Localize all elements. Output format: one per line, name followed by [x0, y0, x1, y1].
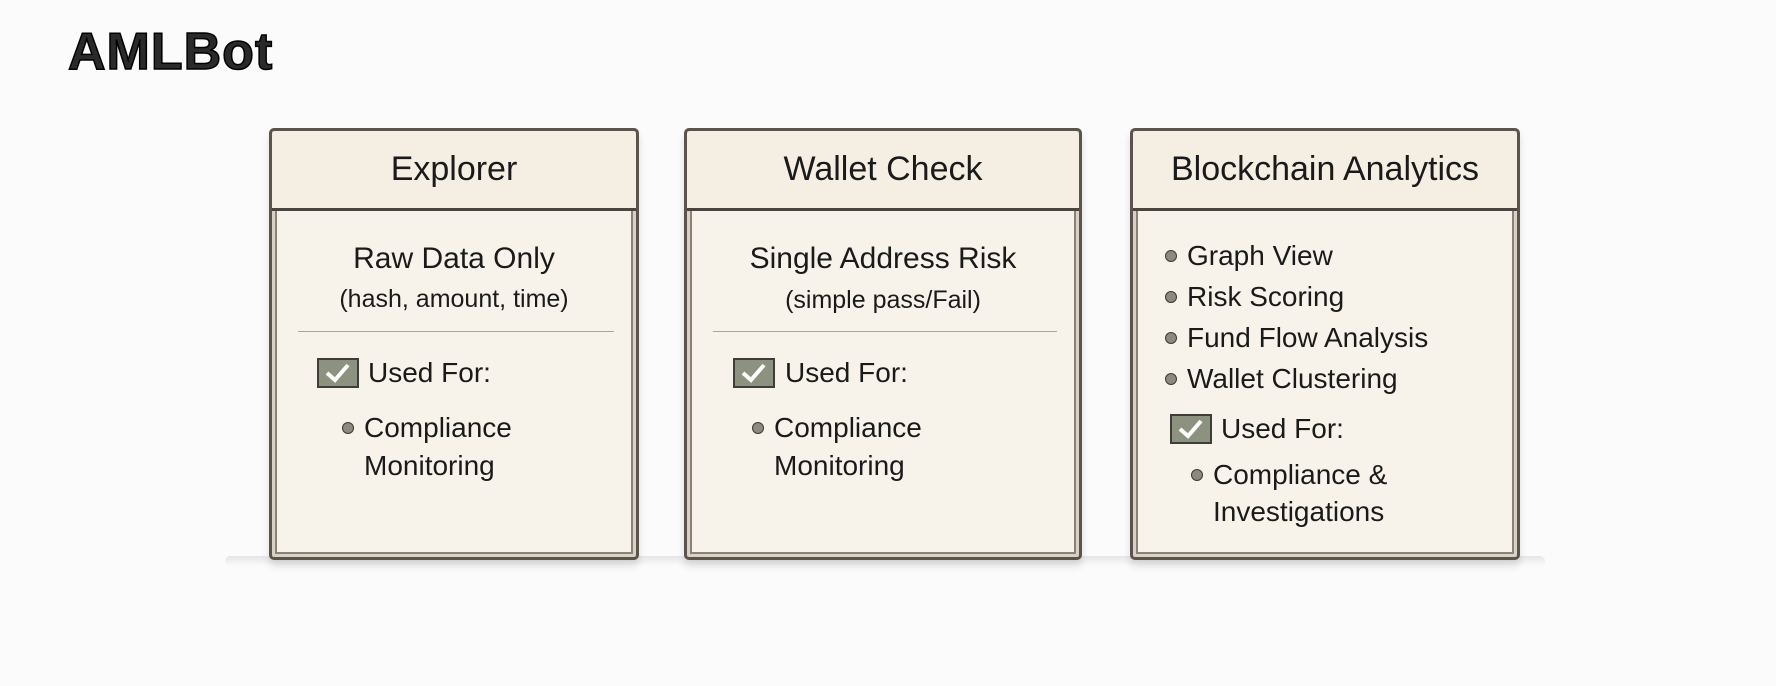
panel: Explorer	[269, 128, 639, 560]
heading: Blockchain Analytics	[1133, 131, 1517, 211]
list: features	[1165, 240, 1428, 394]
list: features: Graph View	[1187, 240, 1333, 271]
bullet: compliance monitoring	[752, 412, 922, 481]
heading: Wallet Check	[687, 131, 1079, 211]
text: used for: Used For:	[1221, 413, 1344, 444]
bullet: compliance investigations: Compliance &	[1213, 459, 1387, 490]
bullet: compliance monitoring	[342, 412, 512, 481]
bullet: compliance monitoring: Compliance	[364, 412, 512, 443]
text: simple pass fail: (simple pass/Fail)	[785, 286, 981, 314]
heading: Explorer: Explorer	[391, 150, 517, 188]
text: single address risk: Single Address Risk	[750, 242, 1016, 275]
list: features: Risk Scoring	[1187, 281, 1344, 312]
text: raw data only: Raw Data Only	[353, 242, 555, 275]
heading: Wallet Check: Wallet Check	[783, 150, 983, 188]
text: hash amount time: (hash, amount, time)	[339, 285, 569, 313]
list: features: Wallet Clustering	[1187, 363, 1398, 394]
panel: Wallet Check	[684, 128, 1082, 560]
text: used for: Used For:	[368, 357, 491, 388]
bullet: compliance monitoring: Monitoring	[774, 450, 905, 481]
panel: Blockchain Analytics	[1130, 128, 1520, 560]
bullet: compliance investigations: Investigations	[1213, 496, 1384, 527]
logo: AMLBot: AMLBot	[68, 23, 273, 81]
bullet: compliance monitoring: Monitoring	[364, 450, 495, 481]
list: features: Fund Flow Analysis	[1187, 322, 1428, 353]
bullet: compliance investigations	[1191, 459, 1387, 527]
icon: checkbox	[317, 358, 359, 388]
icon: checkbox	[733, 358, 775, 388]
shadow strip	[225, 556, 1545, 566]
bullet: compliance monitoring: Compliance	[774, 412, 922, 443]
icon: checkbox	[1170, 414, 1212, 444]
heading: Blockchain Analytics: Blockchain Analytics	[1171, 150, 1479, 188]
text: used for: Used For:	[785, 357, 908, 388]
heading: Explorer	[272, 131, 636, 211]
